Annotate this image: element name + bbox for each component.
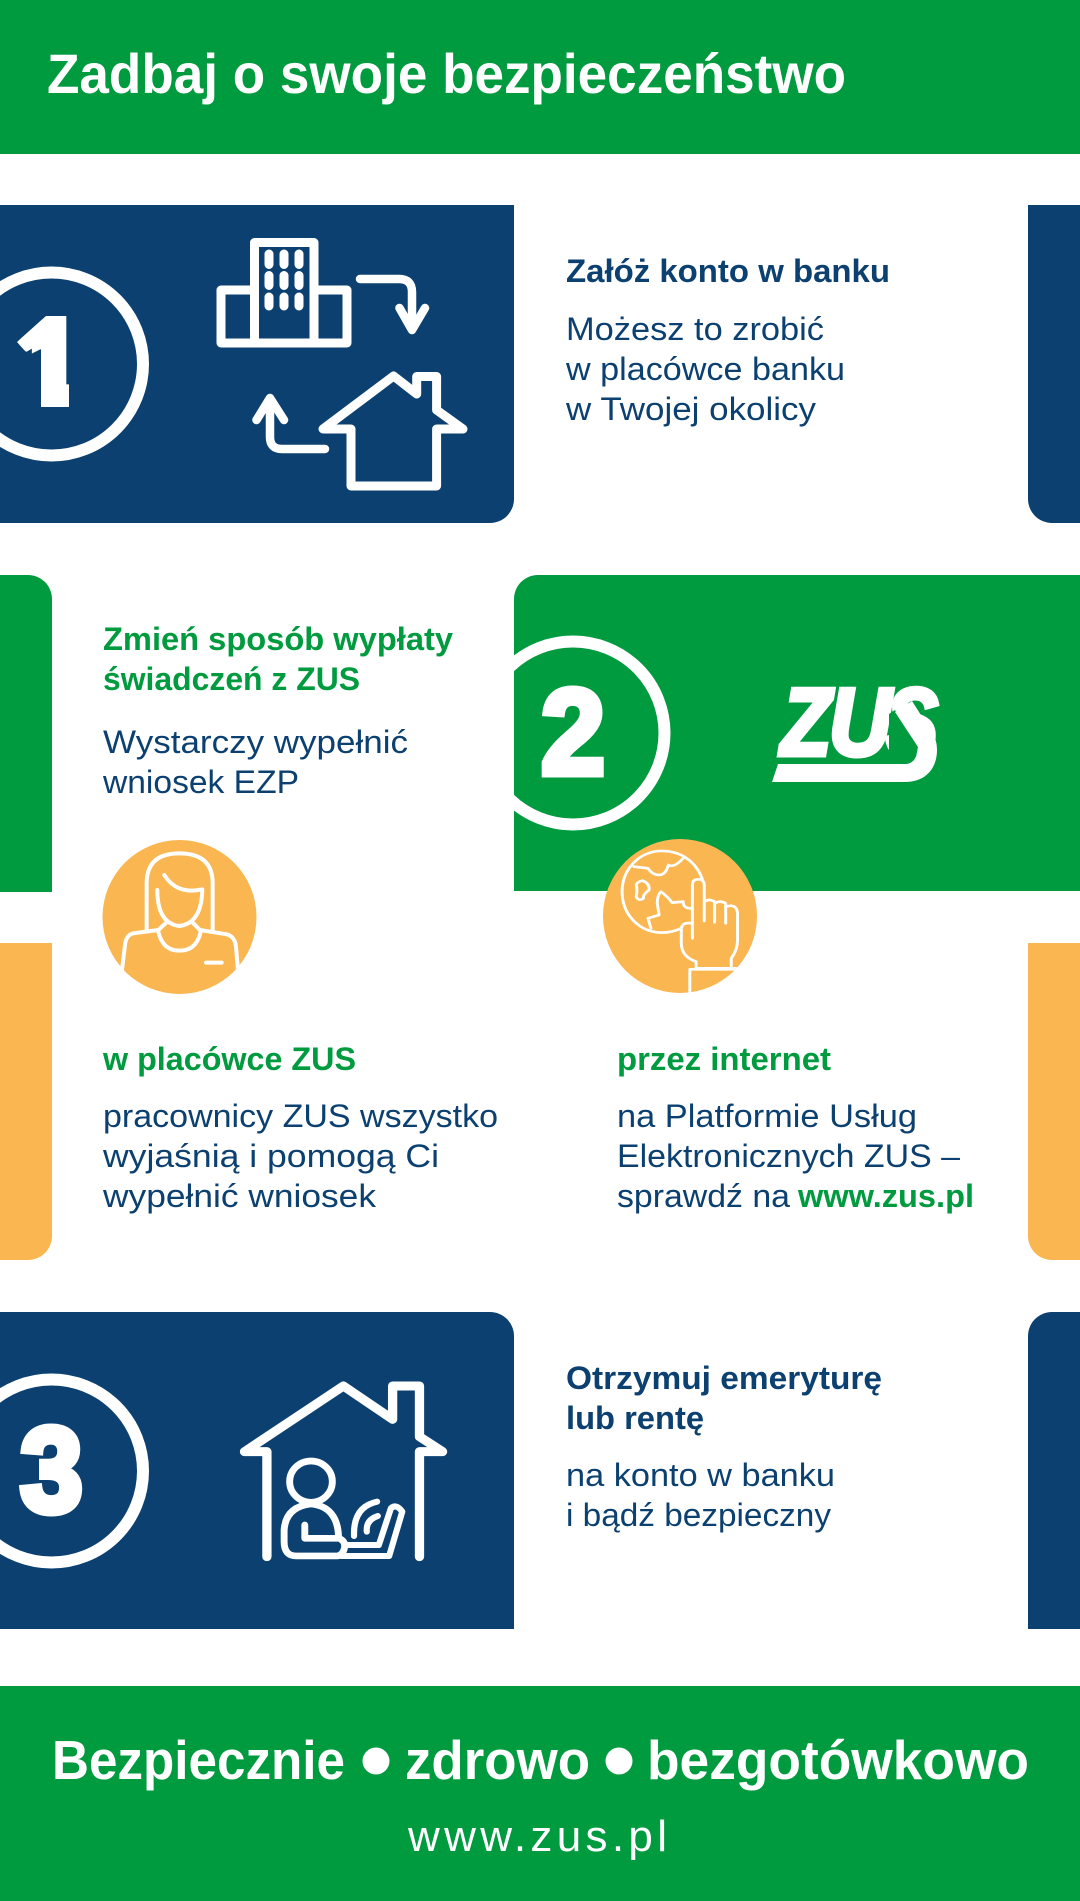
heading: step 1: Załóż konto w banku xyxy=(566,253,890,289)
step 2 number badge xyxy=(482,642,664,824)
body: step 2: Wystarczy wypełnić xyxy=(103,724,408,760)
heading: step 3: Otrzymuj emeryturę xyxy=(566,1360,882,1396)
footer slogan: zdrowo xyxy=(405,1729,590,1791)
body: step 2: wniosek EZP xyxy=(102,764,299,800)
footer slogan: Bezpiecznie xyxy=(52,1729,345,1791)
heading: in branch: w placówce ZUS xyxy=(102,1041,356,1077)
body: step 1: w placówce banku xyxy=(565,351,845,387)
arrow: bank to house xyxy=(360,279,425,330)
body: step 3: i bądź bezpieczny xyxy=(566,1497,831,1533)
panel: step 1 xyxy=(0,205,514,523)
footer url: www.zus.pl xyxy=(407,1812,667,1861)
panel: left green stub xyxy=(0,575,52,892)
heading: step 3: lub rentę xyxy=(566,1400,704,1436)
logo: ZUS: S xyxy=(886,669,938,776)
panel: left orange stub xyxy=(0,943,52,1260)
body: in branch: pracownicy ZUS wszystko xyxy=(103,1098,498,1134)
text: step 2 intro xyxy=(102,621,453,800)
icon: bank building xyxy=(221,242,347,343)
footer band xyxy=(0,1686,1080,1901)
text: step 1 xyxy=(565,253,890,427)
icon: ZUS employee xyxy=(102,840,256,994)
body: in branch: wyjaśnią i pomogą Ci xyxy=(102,1138,439,1174)
logo: ZUS: Z xyxy=(778,669,834,776)
body: via internet: Elektronicznych ZUS – xyxy=(617,1138,960,1174)
header band with title xyxy=(0,0,1080,154)
heading: via internet: przez internet xyxy=(617,1041,831,1077)
body: step 1: w Twojej okolicy xyxy=(565,391,816,427)
body: via internet: na Platformie Usług xyxy=(617,1098,917,1134)
panel: step 3 xyxy=(0,1312,514,1629)
arrow: house to bank xyxy=(256,398,325,449)
step 1 number badge: 1 xyxy=(10,294,82,432)
panel: step 1 right stub xyxy=(1028,205,1080,523)
panel: step 3 right stub xyxy=(1028,1312,1080,1629)
body: in branch: wypełnić wniosek xyxy=(102,1178,377,1214)
step 3 number badge: 3 xyxy=(20,1403,82,1537)
text: via internet xyxy=(617,1041,974,1214)
body: via internet: sprawdź na xyxy=(617,1178,790,1214)
footer slogan xyxy=(52,1729,1029,1791)
icon: person with laptop at home xyxy=(245,1386,443,1557)
panel: step 2 xyxy=(482,575,1080,891)
logo: ZUS xyxy=(772,669,938,782)
step 3 number badge xyxy=(0,1380,143,1562)
heading: step 2: świadczeń z ZUS xyxy=(103,661,360,697)
footer slogan: bezgotówkowo xyxy=(647,1729,1029,1791)
heading: step 2: Zmień sposób wypłaty xyxy=(103,621,453,657)
body: step 3: na konto w banku xyxy=(566,1457,835,1493)
text: step 3 xyxy=(566,1360,882,1533)
title: Zadbaj o swoje bezpieczeństwo xyxy=(47,42,846,105)
panel: right orange stub xyxy=(1028,943,1080,1260)
step 1 number badge xyxy=(0,272,143,456)
icon: house xyxy=(323,376,463,486)
logo: ZUS: U xyxy=(829,669,893,776)
body: step 1: Możesz to zrobić xyxy=(566,311,824,347)
step 2 number badge: 2 xyxy=(541,664,605,800)
text: in ZUS branch xyxy=(102,1041,498,1214)
body: via internet: www.zus.pl xyxy=(797,1178,974,1214)
icon: globe and hand xyxy=(603,839,757,993)
